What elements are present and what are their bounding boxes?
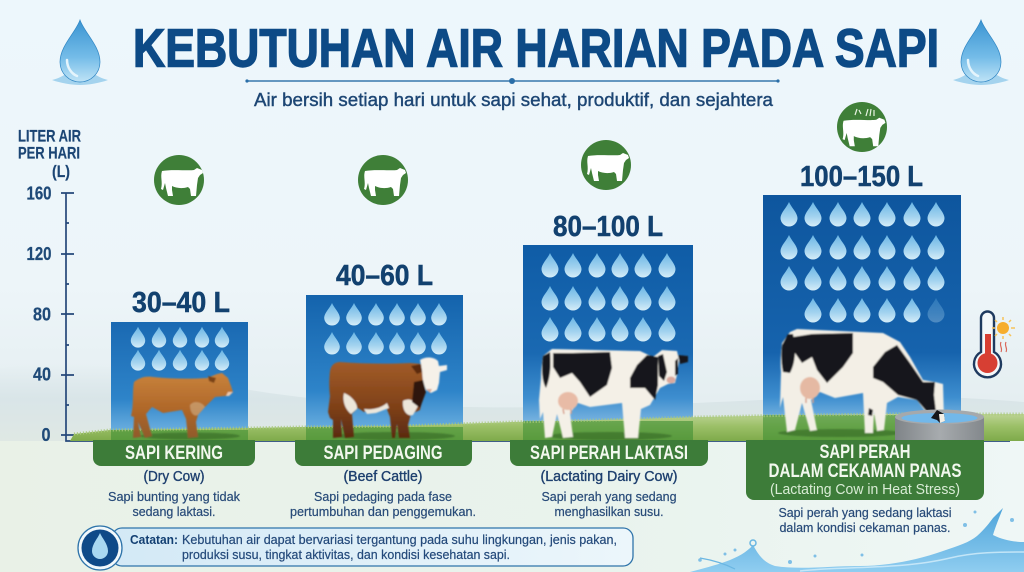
background bbox=[0, 0, 1024, 441]
thermometer icon bbox=[974, 312, 1015, 377]
cow: sapi kering bbox=[131, 373, 240, 440]
label: sapi perah dalam cekaman panas: (Lactating Cow in Heat Stress) bbox=[770, 482, 960, 498]
y axis: 160 bbox=[26, 184, 52, 204]
value: 30-40 L: 30–40 L bbox=[132, 287, 230, 319]
drops: sapi perah cekaman panas bbox=[780, 202, 944, 322]
caption: sapi kering: Sapi bunting yang tidak bbox=[108, 489, 240, 504]
y axis: 80 bbox=[33, 304, 51, 324]
caption: sapi pedaging: Sapi pedaging pada fase bbox=[314, 489, 452, 504]
caption: sapi pedaging: pertumbuhan dan penggemukan. bbox=[290, 504, 476, 519]
icon: water drop right bbox=[953, 20, 1009, 85]
bar: sapi kering bbox=[111, 322, 248, 441]
subtitle: Air bersih setiap hari untuk sapi sehat, produktif, dan sejahtera bbox=[254, 89, 774, 110]
value: 40-60 L: 40–60 L bbox=[336, 260, 433, 292]
axis title: PER HARI bbox=[18, 144, 80, 162]
axis title: LITER AIR bbox=[18, 126, 81, 146]
caption: sapi perah laktasi: Sapi perah yang sedang bbox=[542, 489, 676, 504]
icon: water drop left bbox=[52, 20, 108, 85]
label: sapi kering bbox=[93, 440, 255, 466]
caption: sapi pedaging: (Beef Cattle) bbox=[344, 469, 422, 485]
y axis: 120 bbox=[26, 244, 52, 264]
cow: sapi perah cekaman panas bbox=[778, 329, 944, 437]
icon: cow badge 3 bbox=[581, 140, 631, 190]
label: sapi perah dalam cekaman panas bbox=[746, 440, 984, 500]
grass strip bbox=[70, 414, 1024, 441]
label: sapi perah dalam cekaman panas: DALAM CEKAMAN PANAS bbox=[768, 461, 962, 482]
label: sapi pedaging: SAPI PEDAGING bbox=[324, 443, 442, 464]
note box: Catatan: bbox=[130, 533, 178, 547]
trough bbox=[895, 410, 984, 440]
background hills bbox=[0, 364, 1024, 441]
value: 100-150 L: 100–150 L bbox=[800, 161, 923, 193]
drops: sapi kering bbox=[131, 327, 229, 371]
label: sapi perah laktasi bbox=[510, 440, 708, 466]
note box: produksi susu, tingkat aktivitas, dan kondisi kesehatan sapi. bbox=[182, 547, 510, 562]
background lower band bbox=[0, 441, 1024, 572]
caption: sapi kering bbox=[108, 469, 240, 519]
caption: sapi pedaging bbox=[290, 469, 476, 519]
note box: Kebutuhan air dapat bervariasi tergantung pada suhu lingkungan, jenis pakan, bbox=[182, 532, 617, 547]
icon: cow badge 4 with heat bbox=[837, 102, 887, 152]
bar: sapi perah laktasi bbox=[523, 245, 693, 441]
caption: sapi kering: (Dry Cow) bbox=[144, 469, 204, 485]
caption: sapi perah cekaman panas: Sapi perah yang sedang laktasi bbox=[778, 505, 952, 520]
label: sapi perah laktasi: SAPI PERAH LAKTASI bbox=[530, 443, 688, 464]
label: sapi pedaging bbox=[295, 440, 472, 466]
icon: cow badge 1 bbox=[154, 155, 204, 205]
drops: sapi pedaging bbox=[324, 303, 447, 354]
cow: sapi perah laktasi bbox=[539, 349, 688, 440]
water splash bbox=[690, 508, 1024, 572]
caption: sapi perah laktasi bbox=[540, 469, 678, 519]
value: 80-100 L: 80–100 L bbox=[553, 211, 663, 243]
icon: cow badge 2 bbox=[358, 155, 408, 205]
caption: sapi perah cekaman panas: dalam kondisi cekaman panas. bbox=[780, 520, 950, 535]
cow: sapi pedaging bbox=[328, 357, 455, 440]
axis title: (L) bbox=[52, 162, 70, 181]
y axis: 40 bbox=[33, 364, 51, 384]
bar: sapi perah cekaman panas bbox=[763, 195, 961, 441]
caption: sapi perah laktasi: menghasilkan susu. bbox=[554, 504, 664, 519]
drops: sapi perah laktasi bbox=[542, 253, 676, 342]
note box bbox=[78, 526, 633, 570]
caption: sapi perah cekaman panas bbox=[778, 505, 952, 535]
note icon bbox=[78, 526, 122, 570]
caption: sapi perah laktasi: (Lactating Dairy Cow) bbox=[540, 469, 678, 485]
label: sapi kering: SAPI KERING bbox=[125, 443, 223, 464]
y axis bbox=[26, 184, 1010, 445]
bar: sapi pedaging bbox=[306, 295, 463, 441]
caption: sapi kering: sedang laktasi. bbox=[132, 504, 216, 519]
label: sapi perah dalam cekaman panas: SAPI PERAH bbox=[820, 442, 910, 463]
axis title bbox=[18, 126, 81, 181]
title rule bbox=[245, 78, 780, 84]
y axis: 0 bbox=[42, 425, 50, 445]
